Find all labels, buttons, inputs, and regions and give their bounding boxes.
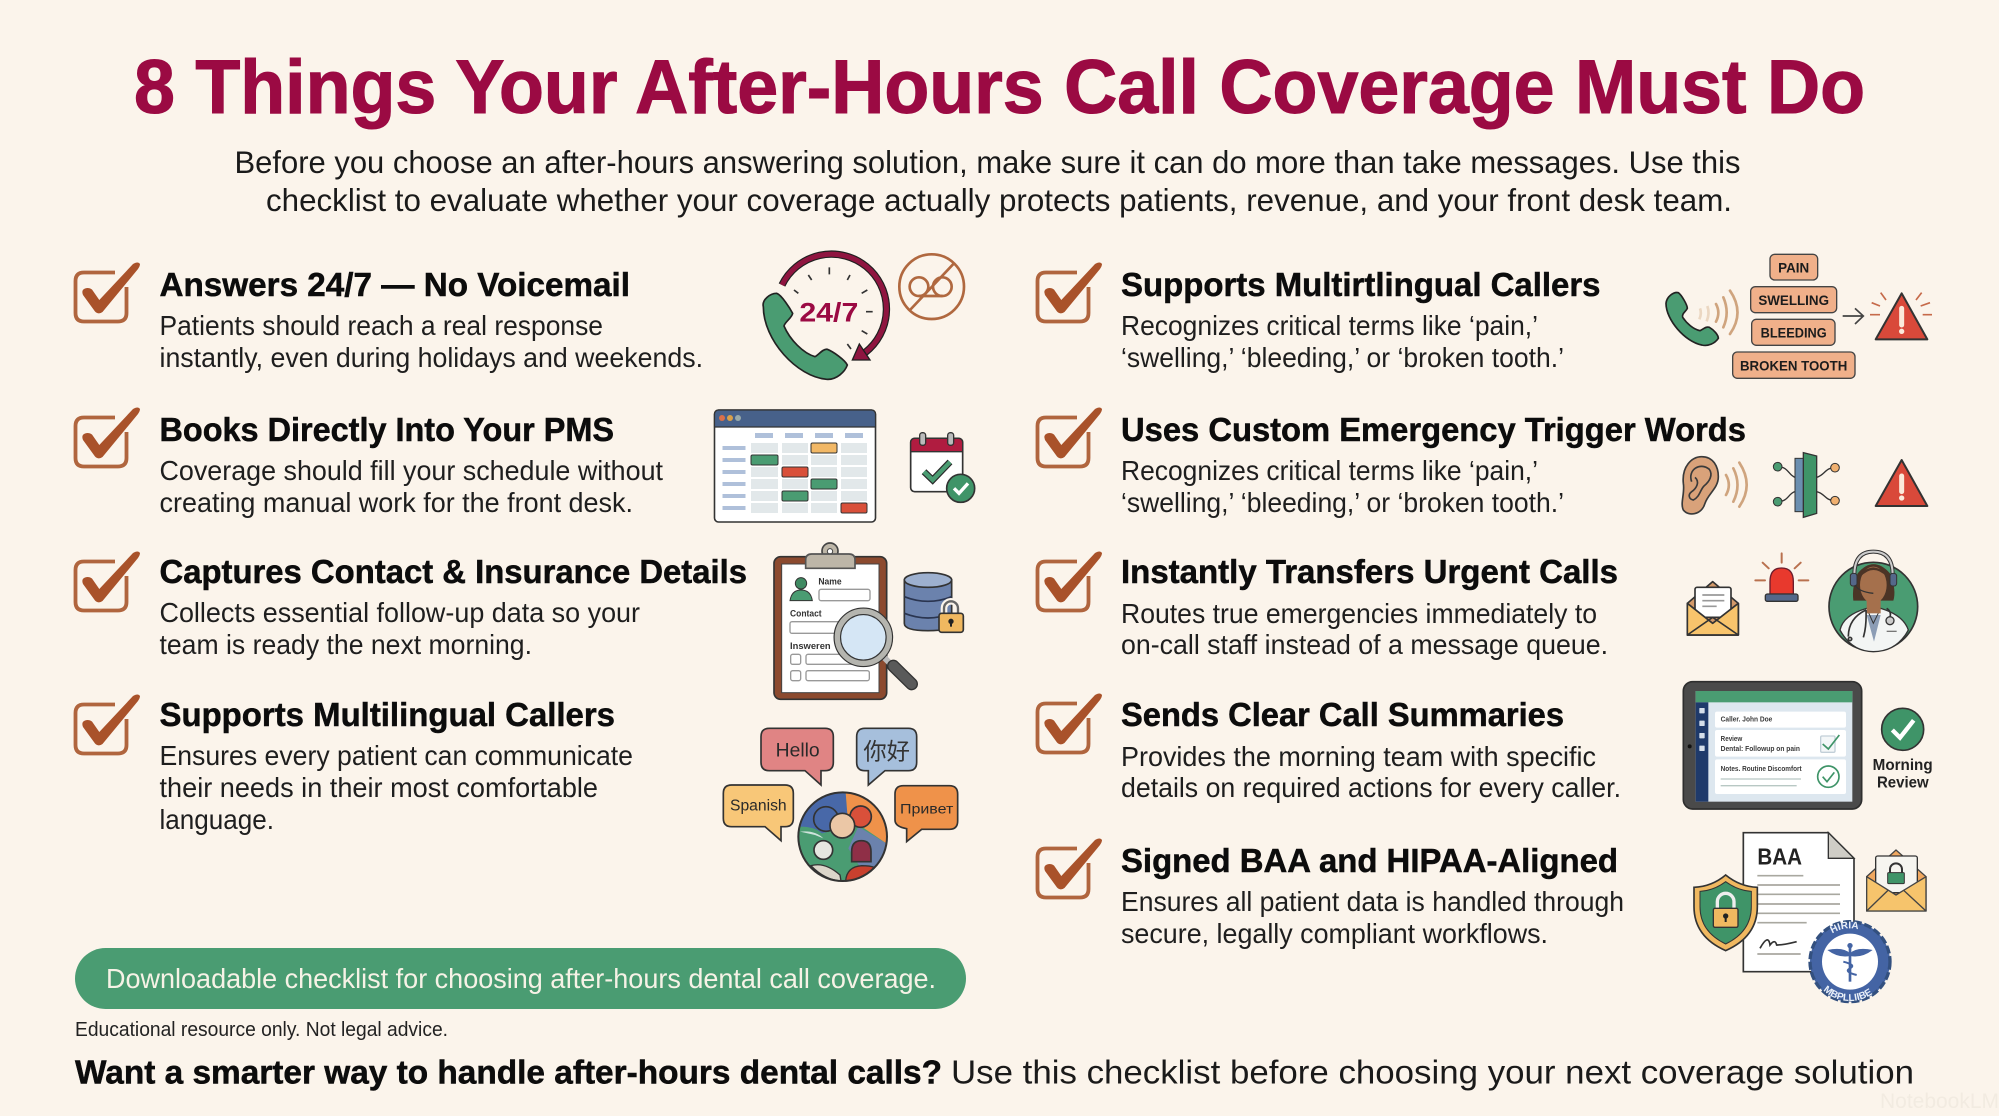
item: captures contact details [76, 543, 963, 699]
icon: phone, term tags and alert: PAIN [1778, 259, 1809, 275]
checkmark icon [1038, 552, 1102, 610]
heading: Instantly Transfers Urgent Calls [1121, 554, 1618, 591]
icon: BAA document, shield, envelope and seal [1693, 831, 1927, 1004]
description: secure, legally compliant workflows. [1121, 918, 1548, 949]
icon: clipboard, magnifier and database: Contact [790, 609, 822, 619]
description: Provides the morning team with specific [1121, 741, 1596, 772]
icon: BAA document, shield, envelope and seal: BAA [1757, 843, 1802, 869]
description: creating manual work for the front desk. [160, 487, 633, 518]
item: books into PMS [74, 254, 1999, 1113]
description [160, 310, 703, 373]
icon: phone, term tags and alert [1666, 254, 1932, 378]
icon: tablet with summaries and morning review: Caller. John Doe [1721, 717, 1772, 724]
icon: tablet with summaries and morning review: Review [1877, 775, 1929, 792]
icon: speech bubbles and people: Spanish [730, 798, 787, 815]
heading: Sends Clear Call Summaries [1121, 697, 1564, 734]
icon: tablet with summaries and morning review [1683, 682, 1933, 809]
icon: speech bubbles and people: Привет [900, 800, 954, 816]
icon: tablet with summaries and morning review: Review [1721, 736, 1743, 743]
description: Patients should reach a real response [160, 310, 603, 341]
bottom line: Want a smarter way to handle after-hours dental calls? [75, 1054, 942, 1090]
checkmark icon [1038, 694, 1102, 752]
item: answers 24/7 [76, 254, 964, 379]
icon: clipboard, magnifier and database: Name [818, 576, 842, 586]
heading: Books Directly Into Your PMS [160, 412, 614, 449]
icon: clipboard, magnifier and database: Insweren [790, 641, 831, 651]
disclaimer: Educational resource only. Not legal advice. [75, 1018, 448, 1041]
description [160, 455, 663, 518]
heading: Captures Contact & Insurance Details [160, 554, 747, 591]
icon: 24/7 phone and no voicemail: 24/7 [799, 298, 858, 328]
heading: Answers 24/7 — No Voicemail [160, 267, 630, 304]
description: Routes true emergencies immediately to [1121, 598, 1597, 629]
item: custom emergency trigger words [1038, 408, 1927, 518]
icon: speech bubbles and people [723, 728, 958, 881]
description [160, 597, 640, 660]
description [160, 740, 633, 835]
heading: Uses Custom Emergency Trigger Words [1121, 412, 1746, 449]
checkmark icon [76, 408, 140, 466]
description [1121, 598, 1608, 660]
icon: speech bubbles and people: Hello [776, 741, 820, 762]
description: Coverage should fill your schedule without [160, 455, 663, 486]
description: instantly, even during holidays and weekends. [160, 342, 703, 373]
heading: Signed BAA and HIPAA-Aligned [1121, 843, 1618, 880]
description [1121, 455, 1564, 518]
icon: BAA document, shield, envelope and seal: MBPLLIIBE [1824, 985, 1872, 1002]
icon: phone, term tags and alert: BROKEN TOOTH [1740, 357, 1847, 373]
description [1121, 741, 1621, 803]
icon: tablet with summaries and morning review: Dental: Followup on pain [1721, 746, 1800, 753]
description: ‘swelling,’ ‘bleeding,’ or ‘broken tooth.’ [1121, 342, 1564, 373]
description: Collects essential follow-up data so your [160, 597, 640, 628]
checkmark icon [76, 552, 140, 610]
checkmark icon [76, 694, 140, 754]
intro paragraph [234, 144, 1740, 218]
icon: clipboard, magnifier and database [774, 543, 963, 699]
checkmark icon [1038, 838, 1102, 898]
icon: BAA document, shield, envelope and seal: HIRIA [1830, 922, 1858, 934]
description [1121, 310, 1564, 373]
checkmark icon [1038, 262, 1102, 322]
call to action pill: Downloadable checklist for choosing after-hours dental call coverage. [106, 963, 936, 994]
checkmark icon [76, 262, 140, 322]
heading: Supports Multirtlingual Callers [1121, 267, 1600, 304]
item: trigger terms [1038, 254, 1932, 378]
icon: envelope, siren and doctor [1687, 552, 1918, 652]
description: their needs in their most comfortable [160, 772, 598, 803]
item: transfers urgent calls [1038, 552, 1918, 660]
icon: ear, router and alert [1682, 453, 1927, 517]
description: team is ready the next morning. [160, 629, 532, 660]
icon: tablet with summaries and morning review: Notes. Routine Discomfort [1721, 766, 1802, 773]
icon: phone, term tags and alert: BLEEDING [1761, 325, 1827, 341]
icon: phone, term tags and alert: SWELLING [1758, 292, 1829, 308]
heading: Supports Multilingual Callers [160, 697, 615, 734]
intro paragraph: Before you choose an after-hours answering solution, make sure it can do more than take messages. Use this [234, 144, 1740, 180]
description: language. [160, 804, 274, 835]
description: Ensures every patient can communicate [160, 740, 633, 771]
description [1121, 886, 1624, 949]
intro paragraph: checklist to evaluate whether your coverage actually protects patients, revenue, and your front desk team. [266, 182, 1732, 218]
bottom line [75, 1054, 1914, 1090]
title: 8 Things Your After-Hours Call Coverage Must Do [134, 45, 1865, 130]
description: details on required actions for every caller. [1121, 772, 1621, 803]
icon: schedule window and calendar [714, 410, 975, 522]
description: Recognizes critical terms like ‘pain,’ [1121, 310, 1538, 341]
item: BAA and HIPAA [1036, 831, 1927, 1004]
icon: speech bubbles and people: 你好 [863, 732, 910, 766]
watermark: NotebookLM [1880, 1090, 1999, 1113]
call to action pill [75, 948, 966, 1009]
description: on-call staff instead of a message queue. [1121, 629, 1608, 660]
description: Ensures all patient data is handled through [1121, 886, 1624, 917]
description: Recognizes critical terms like ‘pain,’ [1121, 455, 1538, 486]
icon: tablet with summaries and morning review: Morning [1873, 757, 1933, 774]
item: multilingual callers [76, 694, 958, 881]
bottom line: Use this checklist before choosing your next coverage solution [951, 1054, 1914, 1090]
checkmark icon [1038, 408, 1102, 466]
item: call summaries [1038, 682, 1933, 809]
icon: 24/7 phone and no voicemail [763, 254, 964, 379]
description: ‘swelling,’ ‘bleeding,’ or ‘broken tooth.’ [1121, 487, 1564, 518]
